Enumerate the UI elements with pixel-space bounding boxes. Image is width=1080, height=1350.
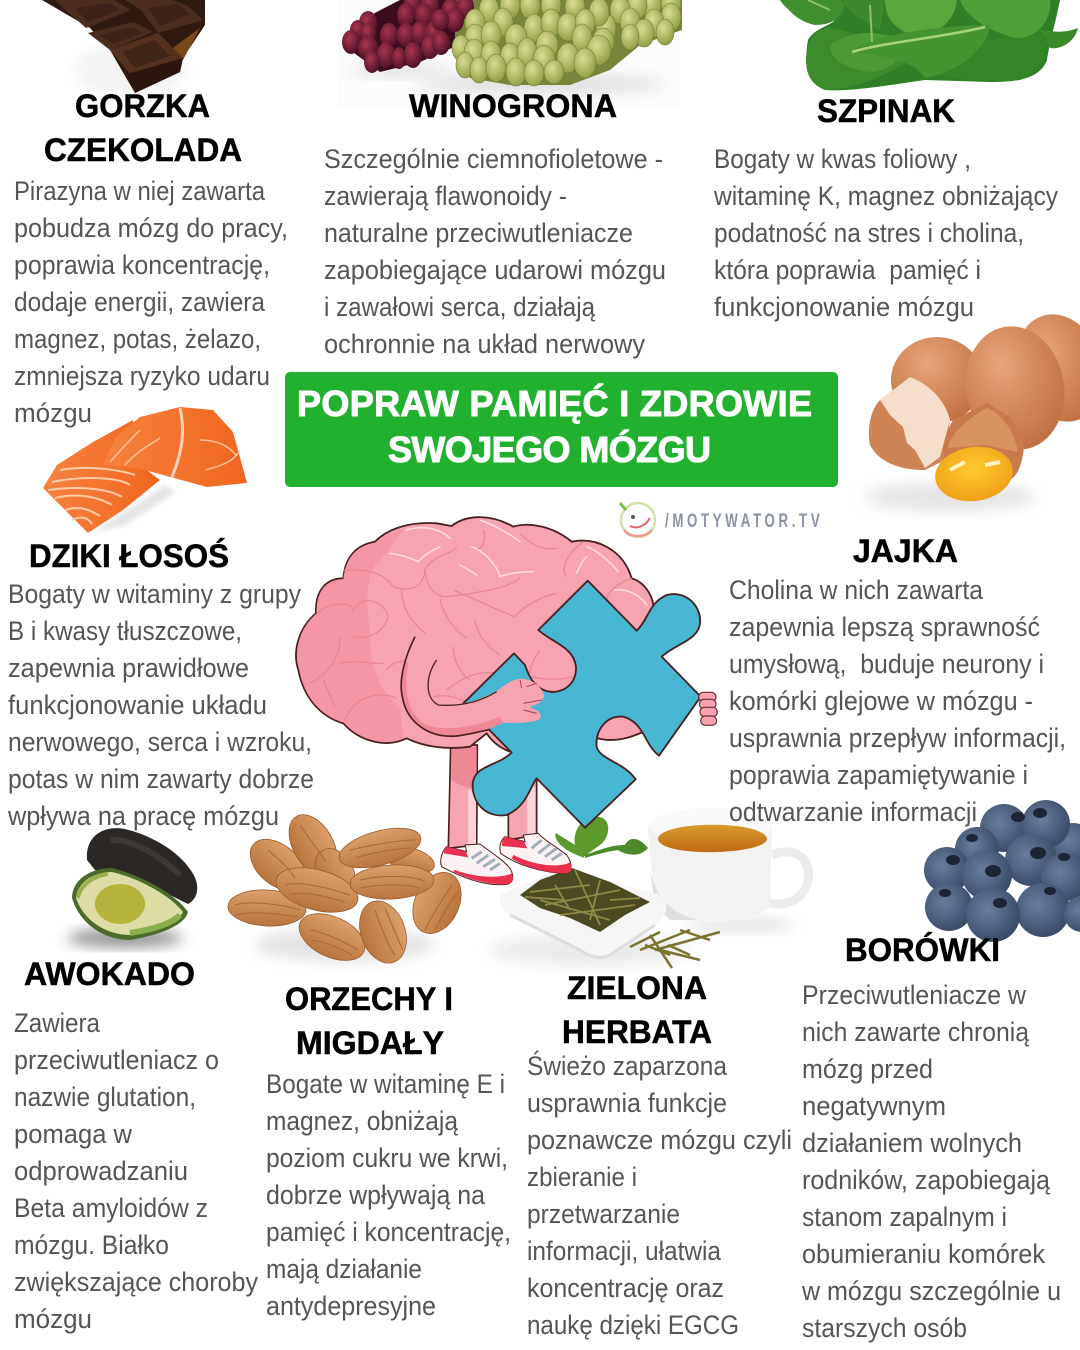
text: salmon description: nerwowego, serca i wzroku, xyxy=(8,727,312,757)
photo: blueberries xyxy=(924,800,1080,942)
text: blueberries description: działaniem wolnych xyxy=(802,1128,1022,1158)
text: eggs description: odtwarzanie informacji xyxy=(729,797,977,827)
arm and hand xyxy=(401,637,544,736)
photo: eggs xyxy=(865,302,1080,511)
heading: winogrona: WINOGRONA xyxy=(409,88,617,124)
text: blueberries description: mózg przed xyxy=(802,1054,933,1084)
logo: motywator.tv xyxy=(620,503,820,537)
text: green tea description: zbieranie i xyxy=(527,1162,637,1192)
heading: awokado: AWOKADO xyxy=(24,956,195,992)
text: salmon description: Bogaty w witaminy z grupy xyxy=(8,579,301,609)
text: salmon description: potas w nim zawarty dobrze xyxy=(8,764,314,794)
text: green tea description: koncentrację oraz xyxy=(527,1273,724,1303)
text: chocolate description: magnez, potas, żelazo, xyxy=(14,324,261,354)
right hand fingers xyxy=(699,692,717,725)
title banner: POPRAW PAMIĘĆ I ZDROWIE xyxy=(297,382,812,424)
text: chocolate description xyxy=(14,176,288,428)
heading: orzechy i migdały: ORZECHY I xyxy=(285,981,453,1017)
text: spinach description xyxy=(713,144,1058,322)
logo: motywator.tv: /MOTYWATOR.TV xyxy=(665,511,820,532)
puzzle piece xyxy=(463,581,701,828)
heading: zielona herbata xyxy=(562,970,712,1050)
text: green tea description: przetwarzanie xyxy=(527,1199,680,1229)
heading: gorzka czekolada: CZEKOLADA xyxy=(44,132,242,168)
text: grapes description: zapobiegające udarowi mózgu xyxy=(324,255,666,285)
text: blueberries description: nich zawarte chronią xyxy=(802,1017,1030,1047)
heading: orzechy i migdały: MIGDAŁY xyxy=(296,1025,444,1061)
photo: almonds xyxy=(227,806,470,970)
text: blueberries description: starszych osób xyxy=(802,1313,967,1343)
text: nuts description: pamięć i koncentrację, xyxy=(266,1217,511,1247)
text: green tea description: Świeżo zaparzona xyxy=(527,1049,728,1081)
text: blueberries description: Przeciwutleniacze w xyxy=(802,980,1026,1010)
brain xyxy=(296,517,660,752)
text: nuts description: dobrze wpływają na xyxy=(266,1180,486,1210)
text: chocolate description: pobudza mózg do pracy, xyxy=(14,213,288,243)
text: green tea description: usprawnia funkcje xyxy=(527,1088,727,1118)
text: eggs description: Cholina w nich zawarta xyxy=(729,575,984,605)
text: nuts description: antydepresyjne xyxy=(266,1291,436,1321)
legs xyxy=(448,745,537,848)
panel: spinach xyxy=(713,0,1078,322)
photo: grapes xyxy=(338,0,682,108)
text: grapes description xyxy=(324,144,666,359)
text: eggs description: umysłową, buduje neurony i xyxy=(729,649,1044,679)
text: avocado description xyxy=(14,1008,258,1334)
text: avocado description: mózgu. Białko xyxy=(14,1230,169,1260)
text: nuts description: mają działanie xyxy=(266,1254,422,1284)
text: blueberries description: stanom zapalnym i xyxy=(802,1202,1007,1232)
text: blueberries description: obumieraniu komórek xyxy=(802,1239,1045,1269)
panel: avocado xyxy=(14,828,258,1334)
text: avocado description: pomaga w xyxy=(14,1119,132,1149)
text: chocolate description: Pirazyna w niej zawarta xyxy=(14,176,266,206)
text: blueberries description: negatywnym xyxy=(802,1091,946,1121)
text: grapes description: ochronnie na układ nerwowy xyxy=(324,329,645,359)
text: eggs description: komórki glejowe w mózgu - xyxy=(729,686,1033,716)
text: chocolate description: zmniejsza ryzyko udaru xyxy=(14,361,270,391)
text: salmon description: wpływa na pracę mózgu xyxy=(7,801,279,831)
shoes xyxy=(441,833,571,885)
heading: orzechy i migdały xyxy=(285,981,453,1061)
text: green tea description: informacji, ułatwia xyxy=(527,1236,722,1266)
panel: green tea xyxy=(490,808,809,1340)
heading: gorzka czekolada: GORZKA xyxy=(75,88,210,124)
text: eggs description: zapewnia lepszą sprawność xyxy=(729,612,1040,642)
text: avocado description: Beta amyloidów z xyxy=(14,1193,208,1223)
illustration: brain character holding puzzle xyxy=(296,517,717,885)
text: eggs description: poprawia zapamiętywanie i xyxy=(729,760,1028,790)
text: avocado description: Zawiera xyxy=(14,1008,101,1038)
photo: tea cup, bowl and leaves xyxy=(490,808,809,968)
heading: dziki łosoś: DZIKI ŁOSOŚ xyxy=(29,538,229,574)
text: avocado description: zwiększające choroby xyxy=(14,1267,258,1297)
text: grapes description: i zawałowi serca, działają xyxy=(324,292,596,322)
text: nuts description xyxy=(266,1069,511,1321)
text: blueberries description xyxy=(801,980,1061,1343)
panel: blueberries xyxy=(801,800,1080,1343)
panel: nuts and almonds xyxy=(227,806,511,1321)
photo: salmon fillets xyxy=(43,407,247,533)
text: salmon description: B i kwasy tłuszczowe, xyxy=(8,616,242,646)
panel: grapes xyxy=(324,0,682,359)
text: grapes description: Szczególnie ciemnofioletowe - xyxy=(324,144,663,174)
text: green tea description: naukę dzięki EGCG xyxy=(527,1310,739,1340)
text: nuts description: magnez, obniżają xyxy=(266,1106,459,1136)
text: salmon description xyxy=(7,579,314,831)
photo: avocado xyxy=(67,828,197,947)
text: avocado description: odprowadzaniu xyxy=(14,1156,188,1186)
text: blueberries description: w mózgu szczególnie u xyxy=(801,1276,1061,1306)
text: blueberries description: rodników, zapobiegają xyxy=(802,1165,1051,1195)
heading: jajka: JAJKA xyxy=(853,533,958,569)
text: grapes description: naturalne przeciwutleniacze xyxy=(324,218,633,248)
text: green tea description xyxy=(527,1049,792,1340)
title banner xyxy=(285,372,838,487)
panel: dark chocolate xyxy=(14,0,288,428)
text: avocado description: przeciwutleniacz o xyxy=(14,1045,219,1075)
title banner: SWOJEGO MÓZGU xyxy=(388,428,711,470)
text: eggs description xyxy=(729,575,1066,827)
heading: szpinak: SZPINAK xyxy=(817,93,955,129)
text: avocado description: nazwie glutation, xyxy=(14,1082,196,1112)
text: avocado description: mózgu xyxy=(14,1304,92,1334)
photo: chocolate bar xyxy=(42,0,205,98)
text: grapes description: zawierają flawonoidy - xyxy=(324,181,567,211)
heading: borówki: BORÓWKI xyxy=(845,932,1000,968)
heading: zielona herbata: HERBATA xyxy=(562,1014,712,1050)
panel: wild salmon xyxy=(7,407,314,831)
text: nuts description: Bogate w witaminę E i xyxy=(266,1069,505,1099)
text: spinach description: funkcjonowanie mózgu xyxy=(714,292,974,322)
text: chocolate description: mózgu xyxy=(14,398,92,428)
text: salmon description: zapewnia prawidłowe xyxy=(8,653,249,683)
panel: eggs xyxy=(729,302,1080,827)
heading: gorzka czekolada xyxy=(44,88,242,168)
photo: spinach xyxy=(780,0,1078,90)
text: chocolate description: dodaje energii, zawiera xyxy=(14,287,266,317)
heading: zielona herbata: ZIELONA xyxy=(567,970,707,1006)
text: salmon description: funkcjonowanie układu xyxy=(8,690,267,720)
text: green tea description: poznawcze mózgu czyli xyxy=(527,1125,792,1155)
text: chocolate description: poprawia koncentrację, xyxy=(14,250,270,280)
text: nuts description: poziom cukru we krwi, xyxy=(266,1143,508,1173)
text: spinach description: która poprawia pamięć i xyxy=(714,255,981,285)
text: spinach description: Bogaty w kwas foliowy , xyxy=(714,144,971,174)
text: spinach description: podatność na stres i cholina, xyxy=(714,218,1024,248)
